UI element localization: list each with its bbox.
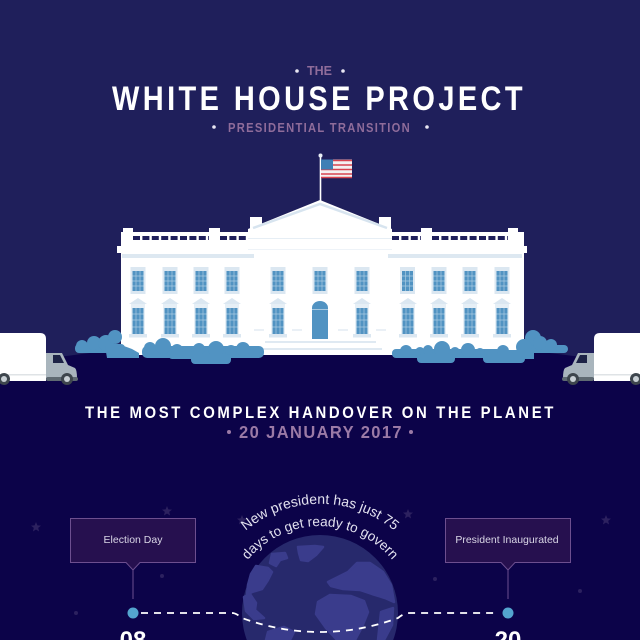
subtitle: PRESIDENTIAL TRANSITION — [228, 120, 411, 135]
roof balustrade — [121, 217, 524, 246]
upper windows — [130, 267, 510, 294]
section heading: THE MOST COMPLEX HANDOVER ON THE PLANET — [85, 403, 556, 422]
bushes: right — [392, 330, 568, 363]
truck: right — [562, 333, 640, 385]
ground — [0, 339, 640, 640]
background stars — [31, 506, 611, 615]
callout: election day: Election Day — [104, 534, 163, 546]
callout: president inaugurated — [446, 518, 570, 599]
cornice — [117, 246, 527, 258]
continents — [244, 546, 394, 640]
white house — [117, 200, 527, 355]
heading: the — [295, 64, 345, 78]
callout: election day — [70, 518, 196, 599]
main building body — [121, 245, 524, 355]
truck: left — [0, 333, 78, 385]
curved caption: New president has just 75 — [240, 494, 400, 530]
globe — [242, 535, 398, 640]
front door — [254, 301, 386, 339]
date line: 20 JANUARY 2017 — [239, 422, 403, 442]
heading: the: THE — [307, 64, 332, 78]
dashed timeline — [141, 613, 498, 632]
front steps — [262, 341, 382, 350]
icon: american flag — [318, 154, 352, 202]
callout: president inaugurated: President Inaugurated — [455, 534, 559, 546]
bushes: left — [75, 330, 264, 364]
title: WHITE HOUSE PROJECT — [112, 80, 526, 118]
timeline point: 08 — [120, 608, 146, 640]
curved caption line 2: days to get ready to govern — [244, 517, 396, 560]
timeline point: 20 — [495, 608, 521, 640]
lower windows — [129, 298, 511, 338]
pediment — [248, 200, 392, 250]
